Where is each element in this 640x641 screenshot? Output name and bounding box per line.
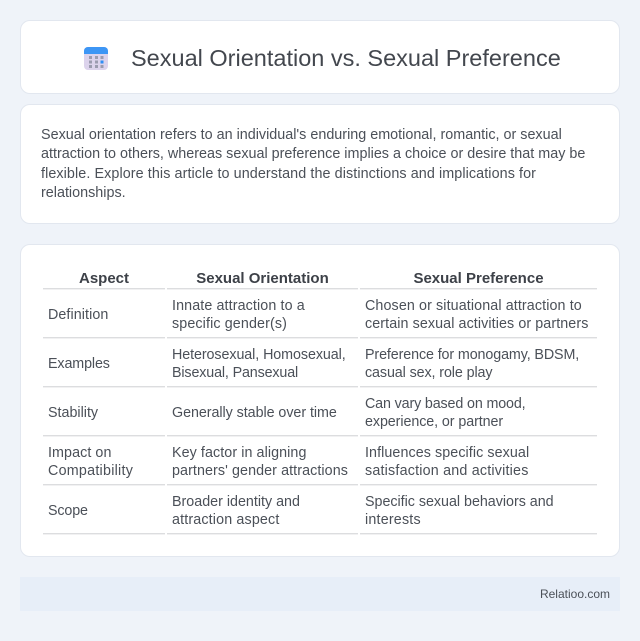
row: impact on compatibility: partners' gender attractions xyxy=(172,463,348,479)
row: impact on compatibility: Key factor in aligning xyxy=(172,445,306,461)
row: definition xyxy=(48,298,588,332)
comparison table xyxy=(43,270,597,535)
footer bar xyxy=(20,577,620,611)
intro text: flexible. Explore this article to understand the distinctions and implications for xyxy=(41,166,536,182)
title: Sexual Orientation vs. Sexual Preference xyxy=(131,45,561,71)
row: definition: Innate attraction to a xyxy=(172,298,305,314)
row: scope: interests xyxy=(365,512,421,528)
row: examples: casual sex, role play xyxy=(365,365,492,381)
row: examples: Bisexual, Pansexual xyxy=(172,365,298,381)
header: sexual preference: Sexual Preference xyxy=(413,270,544,287)
row: definition: Definition xyxy=(48,307,108,323)
header: sexual orientation: Sexual Orientation xyxy=(196,270,329,287)
row: scope: Specific sexual behaviors and xyxy=(365,494,554,510)
row: definition: specific gender(s) xyxy=(172,316,287,332)
row: stability xyxy=(48,396,526,430)
table card xyxy=(20,244,620,557)
intro text: attraction to others, whereas sexual preference implies a choice or desire that may be xyxy=(41,146,585,162)
row: impact on compatibility: satisfaction and activities xyxy=(365,463,529,479)
row: impact on compatibility: Impact on xyxy=(48,445,112,461)
row: examples: Preference for monogamy, BDSM, xyxy=(365,347,579,363)
row: scope: Broader identity and xyxy=(172,494,300,510)
row: definition: certain sexual activities or partners xyxy=(365,316,588,332)
intro text xyxy=(41,127,585,201)
footer text: Relatioo.com xyxy=(540,587,610,601)
row: scope: Scope xyxy=(48,503,88,519)
row: stability: Stability xyxy=(48,405,98,421)
row: examples: Heterosexual, Homosexual, xyxy=(172,347,346,363)
row: stability: Generally stable over time xyxy=(172,405,337,421)
row: stability: Can vary based on mood, xyxy=(365,396,526,412)
row: scope: attraction aspect xyxy=(172,512,279,528)
intro card xyxy=(20,104,620,224)
row: examples: Examples xyxy=(48,356,110,372)
title card xyxy=(20,20,620,94)
icon: calendar xyxy=(84,47,108,70)
row: impact on compatibility: Compatibility xyxy=(48,463,133,479)
header: aspect: Aspect xyxy=(79,270,129,287)
row: stability: experience, or partner xyxy=(365,414,503,430)
intro text: Sexual orientation refers to an individual's enduring emotional, romantic, or sexual xyxy=(41,127,562,143)
row: examples xyxy=(48,347,579,381)
row: scope xyxy=(48,494,554,528)
row: definition: Chosen or situational attraction to xyxy=(365,298,582,314)
row: impact on compatibility: Influences specific sexual xyxy=(365,445,529,461)
intro text: relationships. xyxy=(41,185,126,201)
row: impact on compatibility xyxy=(48,445,529,479)
